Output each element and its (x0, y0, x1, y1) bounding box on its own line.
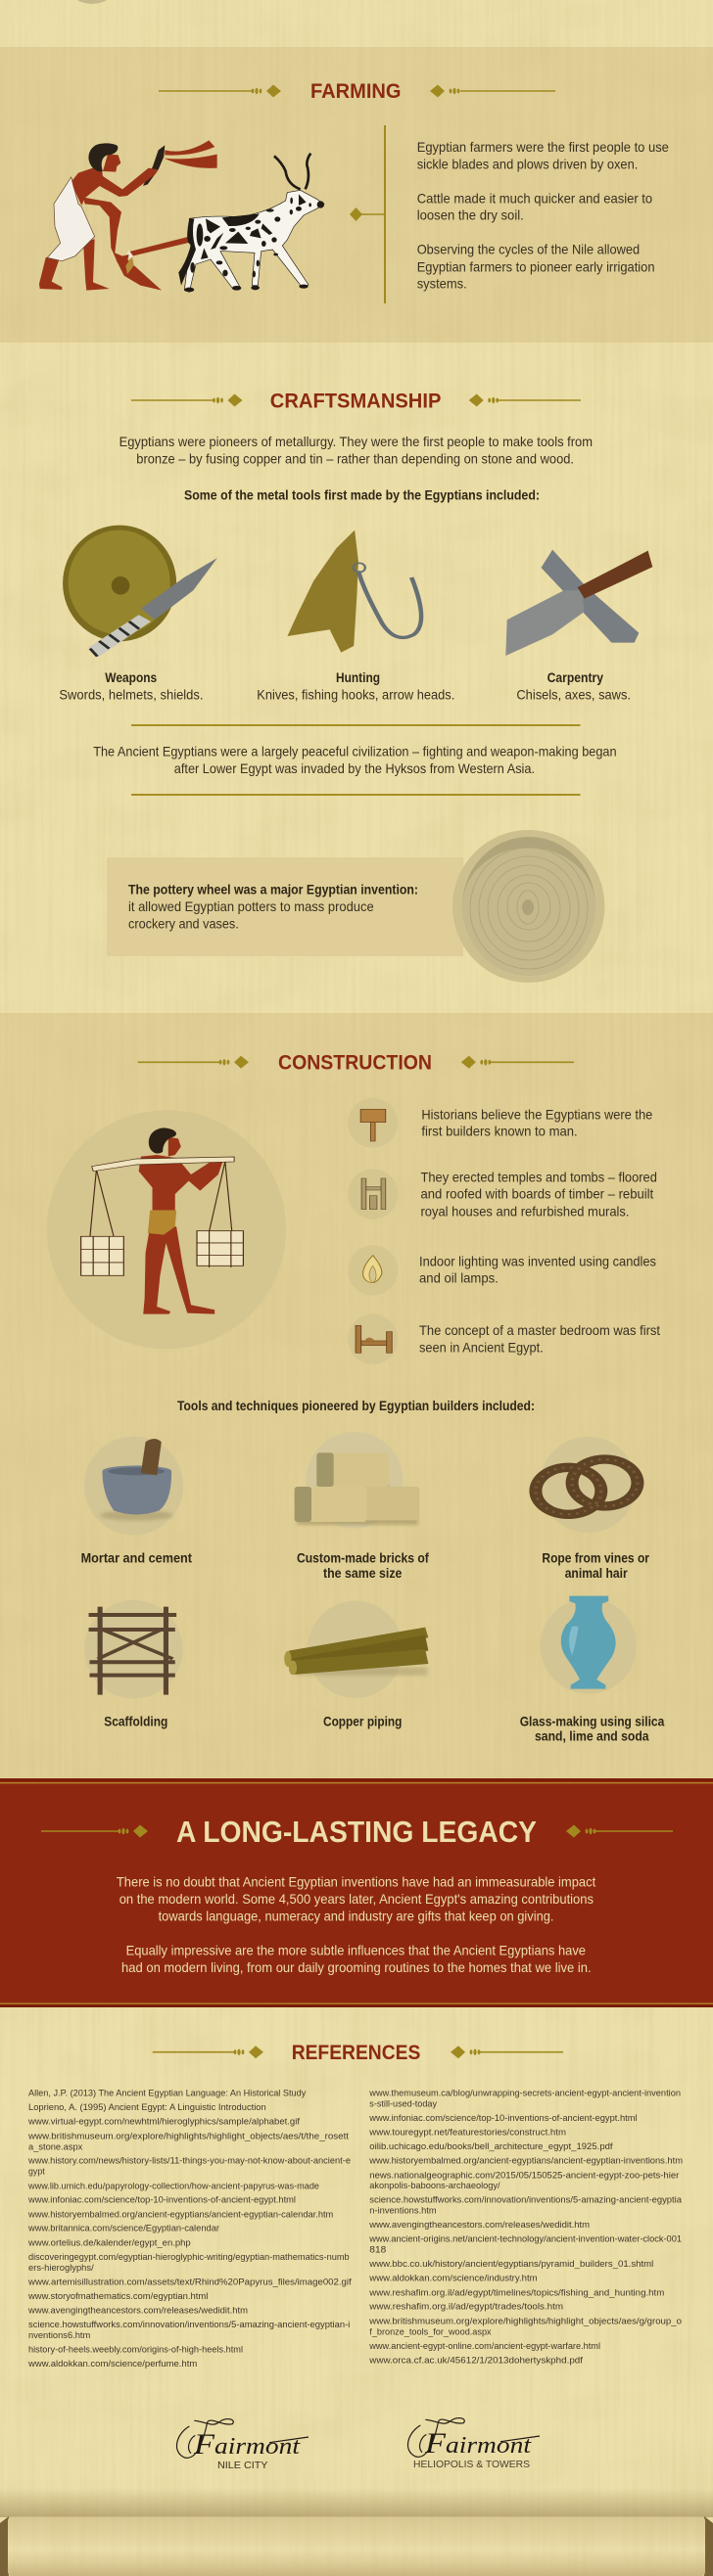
text: farming facts: Egyptian farmers to pioneer early irrigation (417, 258, 654, 274)
farmer's whip (143, 140, 217, 186)
text: references left column: www.history.com/news/history-lists/11-things-you-may-not-know-about-ancient-e (27, 2156, 351, 2167)
label: custom-made bricks: the same size (323, 1565, 403, 1581)
item: mortar and cement (81, 1437, 192, 1566)
text: metallurgy intro: bronze – by fusing copper and tin – rather than depending on stone and wood. (136, 450, 574, 466)
subheading: metal tools: Some of the metal tools first made by the Egyptians included: (184, 486, 540, 502)
label: glass-making: sand, lime and soda (535, 1728, 649, 1744)
callout: pottery wheel (107, 830, 604, 983)
text: references left column: gypt (28, 2167, 45, 2178)
text: farming facts: loosen the dry soil. (417, 207, 524, 223)
logo: Fairmont Heliopolis and Towers (407, 2418, 540, 2470)
fact: bedroom (348, 1314, 660, 1364)
heading: references (153, 2042, 563, 2064)
text: farming facts: Observing the cycles of the Nile allowed (417, 242, 640, 257)
text: farming facts: Egyptian farmers were the first people to use (417, 139, 669, 155)
text: references right column: f_bronze_tools_for_wood.aspx (369, 2326, 492, 2337)
text: references right column: www.avengingtheancestors.com/releases/wedidit.htm (368, 2220, 590, 2231)
text: references right column: www.reshafim.org.il/ad/egypt/timelines/topics/fishing_and_hunting.htm (368, 2287, 664, 2298)
label: carpentry (516, 669, 631, 702)
text: farming facts (417, 139, 669, 292)
text: legacy body: There is no doubt that Ancient Egyptian inventions have had an immeasurable impact (117, 1874, 595, 1890)
text: references right column: www.britishmuseum.org/explore/highlights/highlight_objects/aes/g/group_o (368, 2316, 682, 2326)
text: references left column: ers-hieroglyphs/ (28, 2263, 94, 2274)
text: legacy body (117, 1874, 595, 1975)
text: farming facts: systems. (417, 276, 467, 292)
text: references left column: Allen, J.P. (2013) The Ancient Egyptian Language: An Historical Study (28, 2089, 307, 2099)
text: builders (421, 1106, 652, 1139)
text: pottery wheel: crockery and vases. (128, 916, 239, 932)
fact: lighting (348, 1245, 656, 1296)
text: references left column: www.lib.umich.edu/papyrology-collection/how-ancient-papyrus-was-made (27, 2181, 319, 2191)
text: references left column: www.britishmuseum.org/explore/highlights/highlight_objects/aes/t/the_rosett (27, 2131, 349, 2141)
label: custom-made bricks (297, 1550, 429, 1581)
text: references right column: science.howstuffworks.com/innovation/inventions/5-amazing-ancient-egyptia (369, 2195, 683, 2206)
label: carpentry: Chisels, axes, saws. (516, 686, 631, 702)
text: references left column (27, 2089, 352, 2369)
text: references right column: www.aldokkan.com/science/industry.htm (368, 2274, 538, 2284)
heading: references: REFERENCES (292, 2042, 420, 2064)
text: temples: and roofed with boards of timber – rebuilt (421, 1186, 653, 1202)
text: legacy body: had on modern living, from our daily grooming routines to the homes that we live in. (121, 1959, 592, 1975)
subheading: tools and techniques: Tools and techniques pioneered by Egyptian builders included: (177, 1398, 535, 1413)
heading: legacy: A LONG-LASTING LEGACY (176, 1815, 537, 1849)
illustration: farmer and ox ploughing (39, 140, 324, 292)
text: pottery wheel (128, 882, 418, 932)
panel: farming (39, 80, 669, 303)
icon: arrow head and fish hook (287, 530, 421, 653)
icon: chisel and axe (505, 550, 652, 656)
label: glass-making: Glass-making using silica (520, 1713, 664, 1728)
text: temples: royal houses and refurbished murals. (421, 1203, 629, 1219)
label: hunting: Hunting (336, 669, 380, 685)
logo: Fairmont Heliopolis and Towers: HELIOPOLIS & TOWERS (413, 2460, 530, 2470)
text: references right column: n-inventions.htm (369, 2205, 437, 2216)
label: mortar and cement: Mortar and cement (81, 1550, 192, 1566)
text: references left column: discoveringegypt.com/egyptian-hieroglyphic-writing/egyptian-mathematics-numb (28, 2252, 350, 2263)
text: farming facts: Cattle made it much quicker and easier to (417, 190, 652, 206)
text: temples (421, 1169, 657, 1219)
item: glass-making (520, 1596, 664, 1744)
text: references right column: www.infoniac.com/science/top-10-inventions-of-ancient-egypt.html (368, 2113, 638, 2124)
icon: mallet (348, 1098, 398, 1148)
connector line with diamond (350, 125, 386, 303)
item: carpentry (505, 550, 652, 702)
text: bedroom: The concept of a master bedroom was first (419, 1322, 660, 1338)
icon: scaffolding (84, 1600, 183, 1699)
heading: construction: CONSTRUCTION (278, 1052, 432, 1075)
text: references right column: news.nationalgeographic.com/2015/05/150525-ancient-egypt-zoo-pets-hier (369, 2170, 679, 2181)
logo: Fairmont Heliopolis and Towers: Fairmont (424, 2427, 533, 2460)
text: references right column: www.historyembalmed.org/ancient-egyptians/ancient-egyptian-inventions.htm (368, 2156, 683, 2167)
logo: Fairmont Nile City (176, 2419, 309, 2471)
label: rope: Rope from vines or (542, 1550, 649, 1566)
fact: temples (348, 1169, 657, 1219)
label: weapons (59, 669, 204, 702)
item: weapons (59, 526, 217, 702)
text: pottery wheel: The pottery wheel was a major Egyptian invention: (128, 882, 418, 897)
icon: temple (348, 1169, 398, 1219)
label: copper piping: Copper piping (323, 1713, 402, 1728)
farmer (39, 143, 159, 291)
text: peaceful civilization (93, 744, 617, 776)
heading: farming (159, 80, 555, 103)
heading: construction (138, 1052, 574, 1075)
text: lighting: Indoor lighting was invented using candles (419, 1253, 656, 1268)
text: references left column: www.infoniac.com/science/top-10-inventions-of-ancient-egypt.html (27, 2195, 296, 2206)
icon: blue vase (541, 1596, 637, 1694)
item: hunting (257, 530, 454, 702)
heading: farming: FARMING (310, 80, 402, 103)
text: builders: first builders known to man. (421, 1124, 578, 1139)
text: references right column: www.themuseum.ca/blog/unwrapping-secrets-ancient-egypt-ancient-invention (368, 2089, 681, 2099)
text: references right column: 818 (369, 2244, 386, 2255)
text: lighting: and oil lamps. (419, 1270, 499, 1286)
text: references left column: science.howstuffworks.com/innovation/inventions/5-amazing-ancient-egyptian-i (28, 2320, 350, 2330)
icon: bricks (295, 1432, 419, 1529)
panel: a long-lasting legacy (0, 1778, 713, 2007)
text: references right column: oilib.uchicago.edu/books/bell_architecture_egypt_1925.pdf (369, 2141, 613, 2152)
icon: flame (348, 1245, 398, 1296)
baskets and ropes (81, 1162, 243, 1275)
logo: Fairmont Nile City: NILE CITY (217, 2461, 268, 2471)
label: weapons: Weapons (105, 669, 157, 685)
text: farming facts: sickle blades and plows driven by oxen. (417, 156, 638, 171)
panel: references (27, 2042, 683, 2369)
icon: pottery wheel (452, 830, 604, 983)
text: bedroom (419, 1322, 660, 1355)
heading: legacy (41, 1815, 673, 1849)
label: scaffolding: Scaffolding (104, 1713, 167, 1728)
icon: mortar and pestle (84, 1437, 183, 1535)
icon: shield and dagger (63, 526, 217, 658)
text: peaceful civilization: The Ancient Egyptians were a largely peaceful civilization – fighting and weapon-making began (93, 744, 617, 759)
item: copper piping (284, 1601, 428, 1728)
label: rope (542, 1550, 649, 1581)
icon: bed (348, 1314, 398, 1364)
previous section's pottery disc, cropped at top edge (69, 0, 116, 4)
label: custom-made bricks: Custom-made bricks of (297, 1550, 429, 1566)
text: references left column: history-of-heels.weebly.com/origins-of-high-heels.html (28, 2344, 243, 2355)
fact: builders (348, 1098, 652, 1148)
text: references left column: nventions6.htm (28, 2330, 90, 2341)
text: references right column: www.orca.cf.ac.uk/45612/1/2013dohertyskphd.pdf (368, 2355, 583, 2366)
panel: construction (47, 1052, 664, 1744)
text: peaceful civilization: after Lower Egypt was invaded by the Hyksos from Western Asia. (174, 760, 535, 776)
logo: Fairmont Nile City: Fairmont (193, 2428, 302, 2461)
label: hunting (257, 669, 454, 702)
text: references right column: akonpolis-baboons-archaeology/ (369, 2181, 500, 2191)
text: bedroom: seen in Ancient Egypt. (419, 1339, 544, 1355)
text: references left column: a_stone.aspx (28, 2141, 83, 2152)
scroll roll at bottom (0, 2488, 713, 2576)
text: metallurgy intro: Egyptians were pioneers of metallurgy. They were the first people to make tools from (119, 434, 593, 449)
icon: copper pipes (284, 1601, 428, 1698)
text: references right column: www.ancient-egypt-online.com/ancient-egypt-warfare.html (368, 2341, 600, 2352)
text: references left column: www.historyembalmed.org/ancient-egyptians/ancient-egyptian-calendar.htm (27, 2209, 333, 2220)
item: scaffolding (84, 1600, 183, 1728)
text: references left column: www.avengingtheancestors.com/releases/wedidit.htm (27, 2306, 248, 2317)
text: references left column: Loprieno, A. (1995) Ancient Egypt: A Linguistic Introduction (28, 2102, 266, 2113)
illustration: builder carrying baskets (47, 1110, 286, 1349)
text: legacy body: Equally impressive are the more subtle influences that the Ancient Egyptians have (126, 1942, 586, 1957)
text: references right column: www.reshafim.org.il/ad/egypt/trades/tools.htm (368, 2302, 563, 2313)
text: references right column: s-still-used-today (369, 2098, 437, 2109)
text: pottery wheel: it allowed Egyptian potters to mass produce (128, 898, 374, 914)
text: references right column: www.touregypt.net/featurestories/construct.htm (368, 2128, 566, 2139)
text: builders: Historians believe the Egyptians were the (421, 1106, 652, 1122)
text: references right column: www.ancient-origins.net/ancient-technology/ancient-invention-water-clock-001 (368, 2234, 682, 2245)
item: custom-made bricks (295, 1432, 429, 1581)
text: references right column: www.bbc.co.uk/history/ancient/egyptians/pyramid_builders_01.shtml (368, 2259, 653, 2270)
text: references left column: www.storyofmathematics.com/egyptian.html (27, 2291, 208, 2302)
text: references left column: www.virtual-egypt.com/newhtml/hieroglyphics/sample/alphabet.gif (27, 2117, 300, 2128)
text: lighting (419, 1253, 656, 1286)
item: rope (536, 1437, 649, 1581)
panel: craftsmanship (59, 391, 652, 983)
text: legacy body: towards language, numeracy and industry are gifts that keep on giving. (159, 1908, 554, 1923)
icon: rope rings (536, 1437, 638, 1533)
label: carpentry: Carpentry (547, 669, 603, 685)
label: rope: animal hair (565, 1565, 628, 1581)
builder (92, 1127, 234, 1314)
text: temples: They erected temples and tombs – floored (421, 1169, 657, 1184)
heading: craftsmanship (131, 391, 581, 413)
label: glass-making (520, 1713, 664, 1744)
heading: craftsmanship: CRAFTSMANSHIP (270, 391, 441, 413)
text: references right column (368, 2089, 683, 2366)
text: legacy body: on the modern world. Some 4,500 years later, Ancient Egypt's amazing contributions (119, 1891, 594, 1907)
text: metallurgy intro (119, 434, 593, 466)
text: references left column: www.ortelius.de/kalender/egypt_en.php (27, 2237, 191, 2248)
label: weapons: Swords, helmets, shields. (59, 686, 204, 702)
text: references left column: www.artemisillustration.com/assets/text/Rhind%20Papyrus_files/image002.gif (27, 2277, 352, 2288)
plough (116, 237, 190, 291)
text: references left column: www.britannica.com/science/Egyptian-calendar (27, 2224, 219, 2234)
ox (178, 154, 324, 292)
text: references left column: www.aldokkan.com/science/perfume.htm (27, 2359, 197, 2369)
label: hunting: Knives, fishing hooks, arrow heads. (257, 686, 454, 702)
